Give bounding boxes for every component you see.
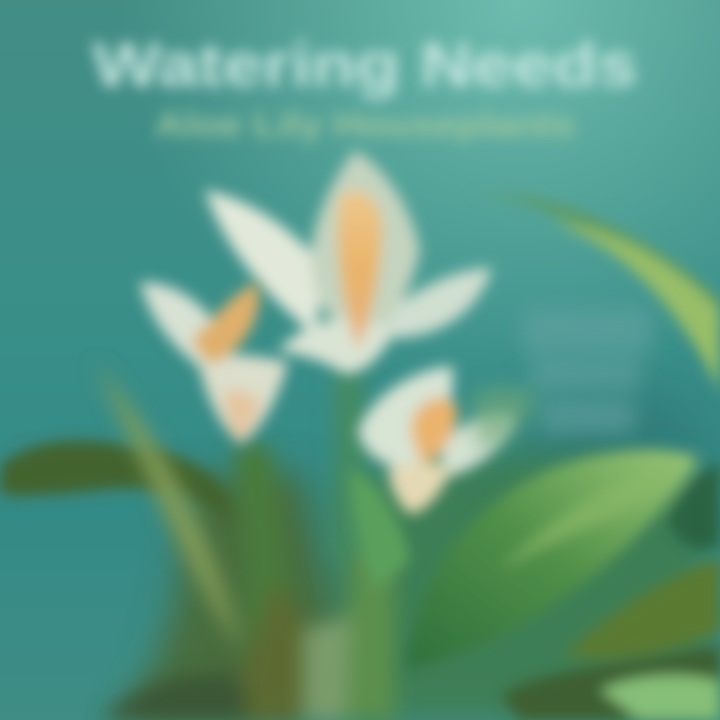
stems and lower leaves (95, 362, 395, 720)
petal: base (388, 463, 452, 514)
green underpainting: plant mass (120, 450, 720, 720)
petal: left (140, 282, 228, 368)
flower: large top (205, 150, 492, 374)
petal: left (358, 366, 453, 472)
petal: base (278, 319, 395, 374)
petal: back (311, 150, 420, 345)
background leaf: left dark (0, 441, 245, 530)
leaves: bottom right (500, 558, 720, 720)
petal: lower orange (222, 390, 260, 442)
flower: left (140, 282, 288, 444)
petal: body (198, 355, 288, 444)
petal: orange centre (192, 282, 259, 364)
flower: right (358, 366, 515, 514)
large leaf: lower right (350, 450, 720, 670)
petal: right (385, 268, 492, 338)
text panel: faint right-hand notes (522, 308, 652, 434)
title: Watering Needs (92, 31, 638, 100)
petal: orange centre (338, 191, 382, 350)
petal: right (440, 413, 515, 477)
petal: orange centre (412, 397, 458, 464)
petal: left (205, 190, 325, 335)
leaf: small pale beside right flower (470, 388, 538, 450)
background leaf: upper right (465, 194, 720, 400)
subtitle: Aloe Lily Houseplants (155, 106, 575, 144)
